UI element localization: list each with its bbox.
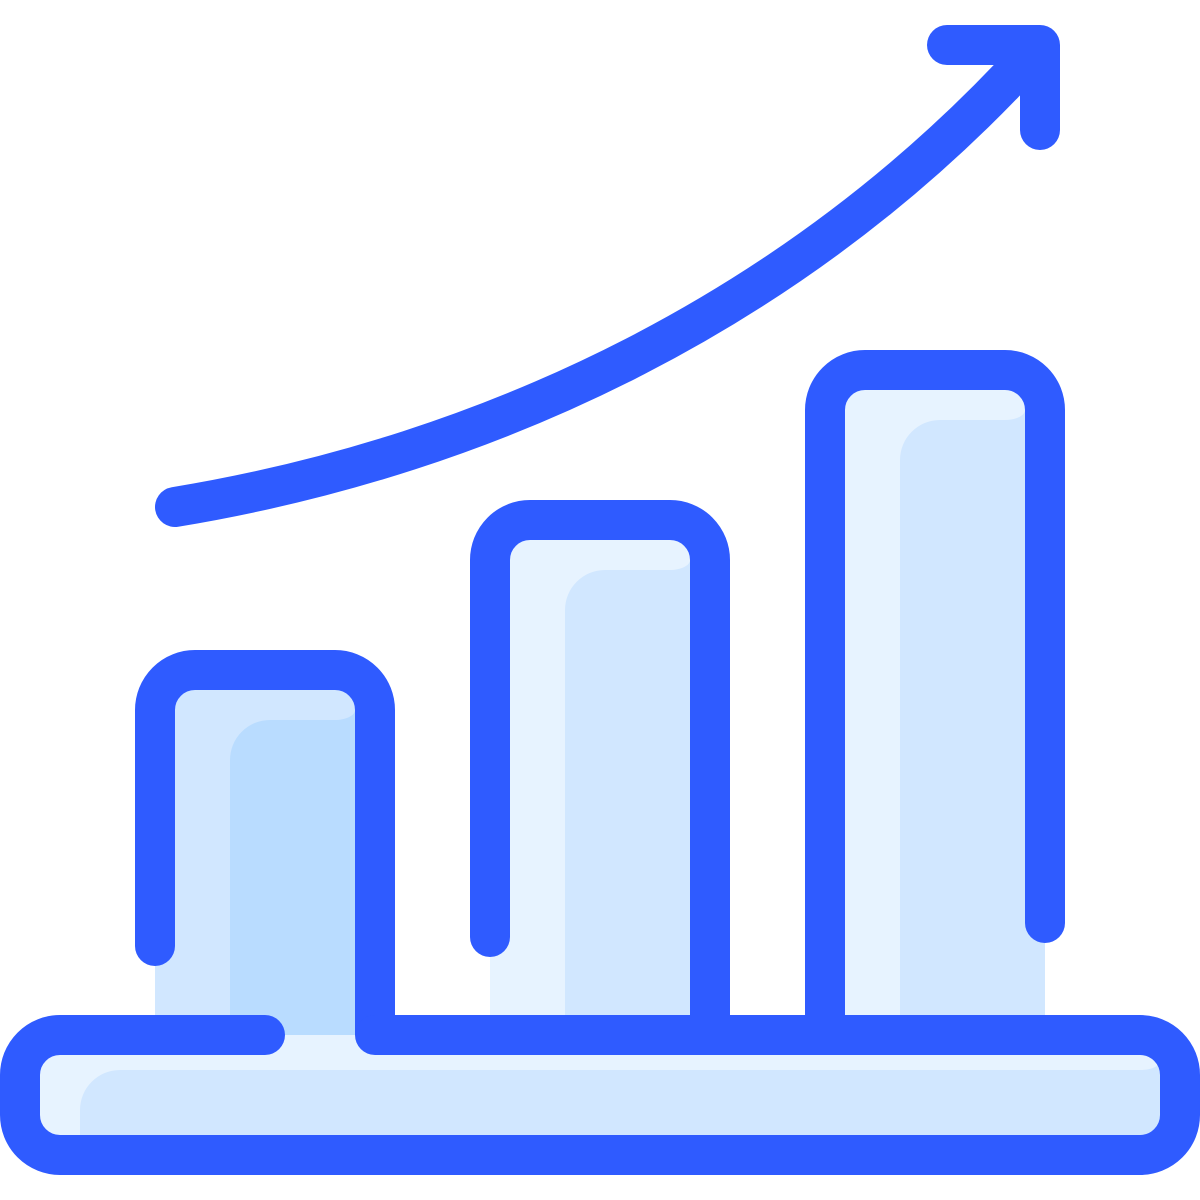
bar 1: short bar — [155, 670, 375, 1035]
base platform — [20, 1035, 1180, 1155]
bar 2: medium bar — [490, 520, 710, 1035]
bar 3: tall bar — [825, 370, 1045, 1035]
arrow: rising growth curve — [175, 45, 1040, 507]
